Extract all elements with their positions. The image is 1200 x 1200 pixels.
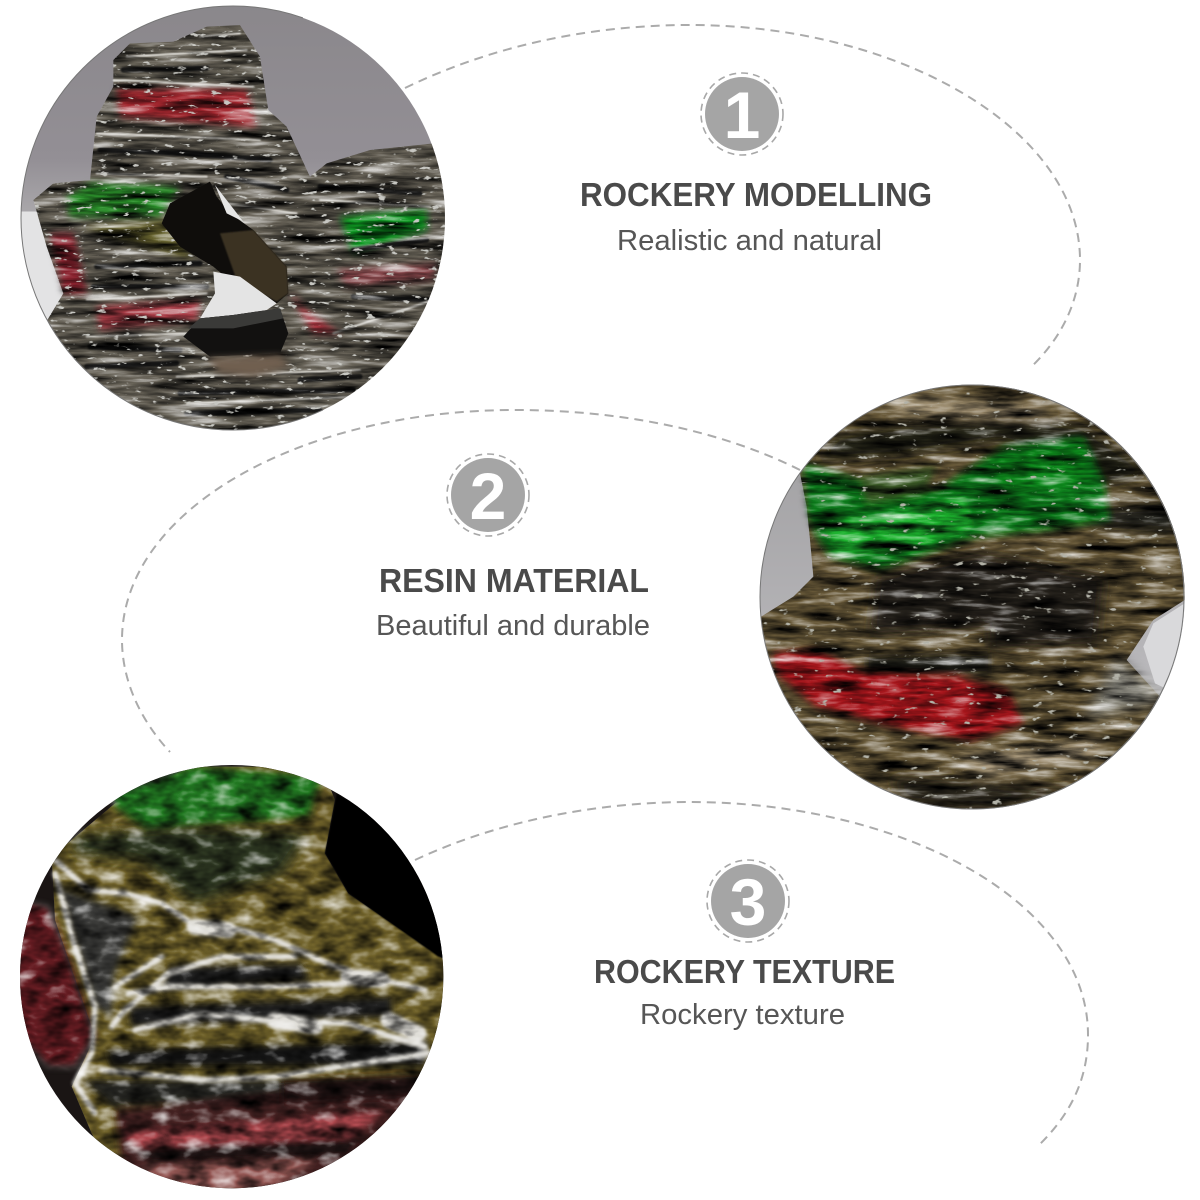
heading 2: RESIN MATERIAL [379,562,649,599]
notch highlight [1143,604,1184,688]
badge 3 [707,860,789,942]
subtext 2: Beautiful and durable [376,610,650,642]
dashed connector curve 3 [415,802,1088,1146]
step 3 block [594,860,895,1031]
badge 2: 2 [470,459,506,533]
cave opening [162,182,288,303]
badge 1: 1 [724,78,760,152]
heading 1: ROCKERY MODELLING [580,176,932,213]
photo circle 3: rockery close-up [15,760,455,1200]
badge 2 [447,454,529,536]
step 2 block [376,454,650,642]
photo circle 1: rockery with cave [20,0,453,433]
dashed connector curve 2 [122,410,800,752]
step 1 block [580,73,932,257]
circle outlines [21,6,1184,809]
badge 3: 3 [730,865,766,939]
subtext 1: Realistic and natural [617,225,882,257]
heading 3: ROCKERY TEXTURE [594,953,895,990]
badge 1 [701,73,783,155]
photo circle 2: green and red rock surface [750,380,1190,820]
dashed connector curve 1 [405,25,1080,368]
white mineral veins [55,860,428,1113]
subtext 3: Rockery texture [640,999,845,1031]
dark cave at upper right [325,793,455,960]
